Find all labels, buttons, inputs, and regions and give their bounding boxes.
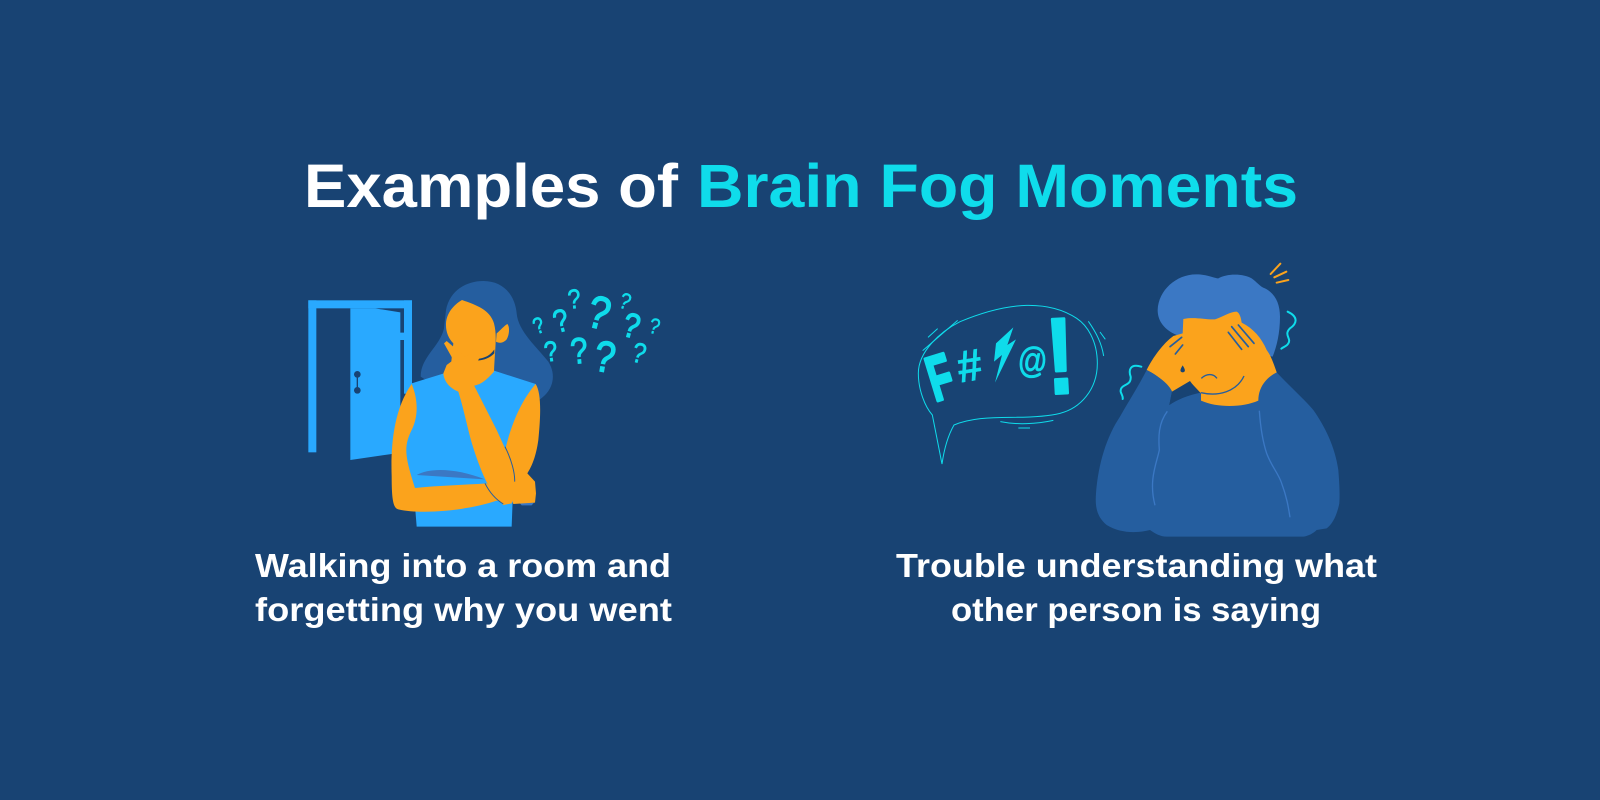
icon: question marks: ? (591, 331, 619, 383)
icon: sweater folds (1152, 411, 1290, 517)
icon: hair (1158, 274, 1280, 357)
caption: left example: forgetting why you went (255, 591, 672, 628)
icon: angry symbols (918, 294, 1078, 417)
caption: left example (255, 547, 672, 628)
icon: teardrop (1180, 365, 1185, 372)
icon: arm crease (485, 447, 515, 504)
icon: open door (308, 300, 412, 460)
icon: question marks: ? (582, 285, 616, 340)
icon: bubble accent strokes (923, 320, 1105, 428)
icon: question marks: ? (629, 336, 650, 370)
icon: question marks: ? (530, 313, 548, 340)
icon: cyan squiggles (1121, 312, 1296, 399)
icon: collar gap (1169, 381, 1198, 405)
icon: question marks: ? (569, 330, 590, 373)
icon: angry symbols: # (953, 338, 986, 393)
icon: question marks (530, 284, 662, 383)
icon: question marks: ? (549, 302, 573, 341)
icon: question marks: ? (566, 284, 582, 315)
icon: angry symbols: F (918, 341, 962, 415)
icon: finger lines (1170, 325, 1254, 354)
icon: sweater (1096, 370, 1340, 537)
icon: question marks: ? (646, 314, 662, 340)
icon: neck and face (446, 300, 509, 386)
icon: question marks: ? (542, 334, 560, 368)
icon: torso (403, 371, 536, 527)
icon: sleeve shadow under hand (519, 503, 534, 505)
icon: angry symbols: ! (1042, 294, 1078, 417)
icon: hair (421, 281, 553, 400)
title: Brain Fog Moments (697, 152, 1298, 220)
icon: frown and mouth (1201, 375, 1244, 394)
icon: orange stress marks (1271, 264, 1288, 283)
title (304, 152, 1298, 220)
caption: right example: Trouble understanding what (896, 547, 1377, 584)
icon: question marks: ? (616, 288, 634, 315)
caption: right example: other person is saying (951, 591, 1321, 628)
icon: face and hands (1147, 312, 1278, 407)
title: Examples of (304, 152, 679, 220)
caption: right example (896, 547, 1377, 628)
icon: arms and hand (391, 341, 540, 512)
icon: angry symbols: @ (1018, 340, 1048, 380)
icon: speech bubble (918, 305, 1097, 464)
icon: neck shadow (477, 349, 494, 361)
caption: left example: Walking into a room and (255, 547, 671, 584)
illustration: woman thinking by a door (308, 281, 662, 527)
icon: shirt fold (417, 470, 485, 479)
illustration: overwhelmed man with speech bubble (918, 264, 1340, 537)
icon: question marks: ? (619, 305, 644, 346)
